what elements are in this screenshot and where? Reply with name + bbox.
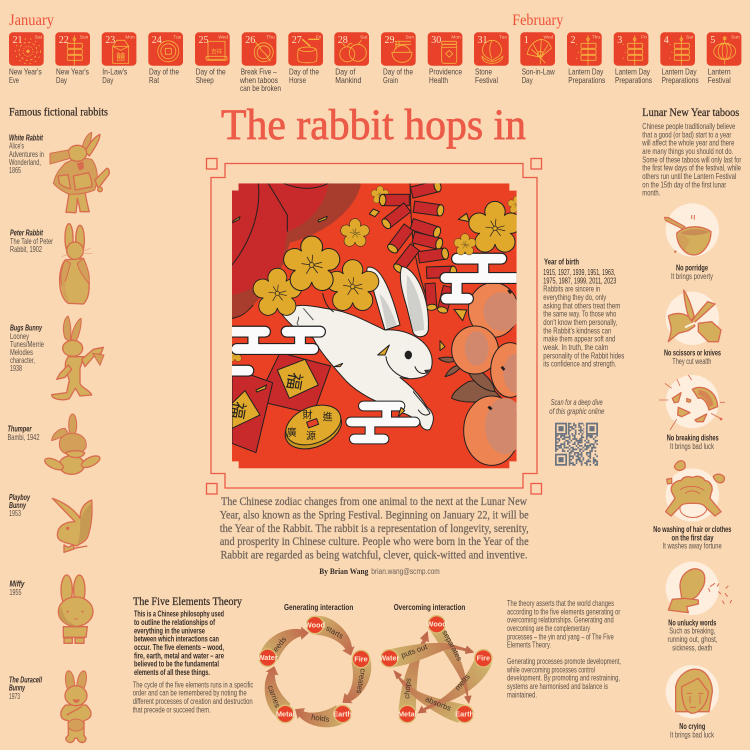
icon: no crying xyxy=(666,665,719,718)
arrows xyxy=(248,616,381,744)
day 21: Eve xyxy=(9,75,19,85)
day 1: Wed xyxy=(544,34,554,40)
Thumper text: Bambi, 1942 xyxy=(8,433,40,442)
oranges with leaves xyxy=(438,284,517,466)
five elements explanation: Generating processes promote development, xyxy=(507,657,621,666)
labels: holds xyxy=(311,712,330,724)
icon: no washing hair xyxy=(666,461,724,522)
five elements explanation: overcoming are the complementary xyxy=(507,624,591,633)
five elements text: believed to be the fundamental xyxy=(134,660,219,669)
day 26: Break Five – xyxy=(241,67,277,77)
day 31 xyxy=(474,32,509,85)
generating interaction diagram xyxy=(248,602,381,744)
icon: no unlucky words xyxy=(666,562,732,615)
day 23: 囍 xyxy=(116,51,125,62)
year of birth text: the Rabbit's kindness can xyxy=(543,326,612,335)
Playboy Bunny text xyxy=(9,493,30,518)
day 1: Day xyxy=(522,75,533,85)
day 1: 1 xyxy=(524,35,529,46)
White Rabbit text: 1865 xyxy=(9,166,21,175)
day 4: Sat xyxy=(686,34,694,40)
five elements explanation xyxy=(506,599,621,699)
day 26: Thu xyxy=(266,34,275,40)
day 22: Sun xyxy=(80,34,89,40)
day 5: Sun xyxy=(731,34,740,40)
day 24: Day of the xyxy=(149,67,179,77)
day 30: Providence xyxy=(429,67,462,77)
day 28 xyxy=(334,32,369,85)
day 23: Day xyxy=(102,75,114,85)
day 22: Day xyxy=(56,75,68,85)
day 3: Preparations xyxy=(615,75,652,85)
text: no scissors: They cut wealth xyxy=(672,357,712,366)
day 31: Festival xyxy=(475,75,498,85)
red envelopes with paper charms: 福 xyxy=(226,400,249,421)
Bugs Bunny text: character, xyxy=(10,356,35,365)
Bugs Bunny text xyxy=(10,324,44,373)
five elements text: The Five Elements Theory xyxy=(133,596,242,608)
Duracell Bunny text: The Duracell xyxy=(9,675,42,684)
five elements text: that precede or succeed them. xyxy=(133,705,211,714)
icon: no porridge xyxy=(664,203,719,257)
year of birth text: 1915, 1927, 1939, 1951, 1963, xyxy=(543,268,615,277)
labels: puts out xyxy=(400,642,429,660)
five elements text: between which interactions can xyxy=(134,635,219,644)
day 25 xyxy=(195,32,230,85)
day 3: Fri xyxy=(641,34,647,40)
day 21 xyxy=(9,32,44,85)
day 31: Tue xyxy=(499,34,507,40)
day 3 xyxy=(614,32,652,85)
nodes: Metal xyxy=(398,709,417,718)
day 2: 2 xyxy=(570,35,576,46)
nodes: Wood xyxy=(305,620,325,629)
text: no unlucky words: No unlucky words xyxy=(668,618,717,627)
Peter Rabbit text xyxy=(10,229,53,254)
heading: Lunar New Year taboos xyxy=(642,107,740,119)
arrows xyxy=(390,628,492,723)
five elements text: This is a Chinese philosophy used xyxy=(134,610,224,619)
five elements text: different processes of creation and destruction xyxy=(133,697,253,706)
White Rabbit text: Wonderland, xyxy=(9,158,41,167)
year of birth text: Year of birth xyxy=(544,258,579,267)
QR caption: of this graphic online xyxy=(549,407,605,416)
day 21: New Year's xyxy=(9,67,42,77)
day 25: 25 xyxy=(198,35,208,46)
Playboy Bunny text: Bunny xyxy=(9,501,26,510)
gold coin: 廣 xyxy=(287,426,297,439)
White Rabbit text xyxy=(9,134,44,175)
Bugs Bunny figure xyxy=(52,316,104,400)
day 23 xyxy=(102,32,136,85)
day 26 xyxy=(239,32,281,93)
day 2: Lantern Day xyxy=(568,67,604,77)
day 1: Son-in-Law xyxy=(522,67,555,77)
text: no scissors: No scissors or knives xyxy=(664,349,721,358)
White Rabbit text: Adventures in xyxy=(9,150,44,159)
day 5 xyxy=(707,32,741,85)
five elements explanation: systems are harmonised and balance is xyxy=(507,682,608,691)
day 23: In-Law's xyxy=(102,67,127,77)
day 2 xyxy=(567,32,605,85)
labels xyxy=(266,624,368,724)
labels: chops xyxy=(402,678,413,699)
red envelopes with paper charms: 福 xyxy=(283,371,306,392)
heading: Famous fictional rabbits xyxy=(9,107,108,119)
day 28: Sat xyxy=(360,34,368,40)
day 26: when taboos xyxy=(239,75,278,85)
day 5: Festival xyxy=(708,75,731,85)
day 24: Tue xyxy=(173,34,182,40)
text: no breaking dishes xyxy=(667,434,719,451)
heading: Generating interaction xyxy=(284,602,353,612)
day 30: Mon xyxy=(451,34,461,40)
QR caption: Scan for a deep dive xyxy=(551,398,603,407)
gold coin xyxy=(284,404,342,450)
byline xyxy=(319,566,440,576)
illustration background xyxy=(230,182,520,472)
Duracell Bunny figure xyxy=(61,670,91,743)
Thumper text xyxy=(8,425,40,442)
nodes: Wood xyxy=(427,620,447,629)
nodes xyxy=(379,616,492,723)
year of birth text: personality of the Rabbit hides xyxy=(543,351,624,360)
icon: no breaking dishes xyxy=(659,375,725,430)
panel: lunar new year taboos xyxy=(642,107,741,739)
White Rabbit text: White Rabbit xyxy=(9,134,43,143)
calendar strip xyxy=(9,32,741,93)
Bugs Bunny text: Looney xyxy=(10,332,30,341)
white clouds xyxy=(227,259,520,439)
labels: separates xyxy=(440,629,464,663)
five elements explanation: processes – the yin and yang – of The Five xyxy=(507,632,614,641)
day 27 xyxy=(288,32,323,85)
day 5: 5 xyxy=(710,35,715,46)
rabbit xyxy=(282,267,433,430)
gold coin: 財 xyxy=(303,409,313,422)
day 29 xyxy=(381,32,416,85)
dark red lantern shape xyxy=(232,183,361,319)
labels: melts xyxy=(453,672,472,692)
day 24 xyxy=(148,32,183,85)
labels: creates xyxy=(354,668,368,694)
day 3: Lantern Day xyxy=(615,67,651,77)
nodes: Water xyxy=(379,654,400,663)
day 29: Day of the xyxy=(383,67,413,77)
day 1 xyxy=(520,32,555,85)
panel: famous fictional rabbits xyxy=(8,107,109,743)
nodes: Water xyxy=(258,653,278,662)
nodes: Earth xyxy=(455,709,475,718)
day 31: 31 xyxy=(478,35,488,46)
nodes: Fire xyxy=(354,654,368,663)
labels: absorbs xyxy=(424,694,453,713)
five elements explanation: while overcoming processes control xyxy=(506,665,595,674)
firecrackers xyxy=(379,180,457,314)
year of birth text: weak. In truth, the calm xyxy=(543,343,608,352)
Bugs Bunny text: Bugs Bunny xyxy=(10,324,42,333)
red envelopes with paper charms xyxy=(226,353,331,453)
Bugs Bunny text: Melodies xyxy=(10,348,33,357)
five elements text: occur. The five elements – wood, xyxy=(134,643,224,652)
Playboy Bunny text: 1953 xyxy=(9,509,21,518)
intro paragraph xyxy=(220,494,529,562)
day 29: Sun xyxy=(405,34,414,40)
Bugs Bunny text: Tunes/Merrie xyxy=(10,340,44,349)
text: no scissors xyxy=(664,349,721,366)
Playboy Bunny text: Playboy xyxy=(9,493,30,502)
heading: February: February xyxy=(512,12,564,29)
intro paragraph: Year, also known as the Spring Festival. Beginning on January 22, it will be xyxy=(220,508,529,522)
text: no porridge: No porridge xyxy=(676,264,708,273)
intro paragraph: The Chinese zodiac changes from one animal to the next at the Lunar New xyxy=(221,494,527,508)
icon: no scissors xyxy=(666,290,721,345)
intro paragraph: and prosperity in Chinese culture. People who were born in the Year of the xyxy=(220,534,529,548)
five elements text: elements of all these things. xyxy=(134,668,210,677)
Bugs Bunny text: 1938 xyxy=(10,364,22,373)
five elements text: to outline the relationships of xyxy=(134,618,215,627)
day 30: Health xyxy=(429,75,448,85)
day 27: 27 xyxy=(292,35,302,46)
day 24: Rat xyxy=(149,75,160,85)
text: no breaking dishes: No breaking dishes xyxy=(667,434,719,443)
year of birth text xyxy=(543,258,624,369)
day 26: can be broken xyxy=(240,83,281,93)
nodes: Earth xyxy=(333,709,353,718)
day 21: Sat xyxy=(35,34,43,40)
five elements explanation: according to the five elements generating or xyxy=(507,607,620,616)
large flowers xyxy=(253,201,521,417)
year of birth text: asking that others treat them xyxy=(543,301,620,310)
QR code xyxy=(555,424,598,465)
five elements text: fire, earth, metal and water – are xyxy=(134,651,224,660)
White Rabbit text: Alice's xyxy=(9,142,24,151)
day 24: 24 xyxy=(152,35,162,46)
five elements explanation: development. By promoting and restraining, xyxy=(507,674,620,683)
Peter Rabbit text: Peter Rabbit xyxy=(10,229,43,238)
day 3: 3 xyxy=(617,35,622,46)
five elements text xyxy=(133,596,253,714)
day 25: 吉祥 xyxy=(211,47,223,55)
Miffy figure xyxy=(58,575,93,643)
labels: feeds xyxy=(270,635,288,655)
labels: starts xyxy=(324,624,345,641)
nodes xyxy=(258,616,370,723)
day 5: Lantern xyxy=(708,67,731,77)
heading: Overcoming interaction xyxy=(394,602,465,612)
day 30: 30 xyxy=(431,35,441,46)
Thumper text: Thumper xyxy=(8,425,32,434)
text: no unlucky words: running out, ghost, xyxy=(668,635,718,644)
text: no washing xyxy=(653,525,732,551)
day 28: Mankind xyxy=(335,75,362,85)
day 30 xyxy=(428,32,462,85)
five elements text: order and can be remembered by noting the xyxy=(133,689,247,698)
text: no crying: No crying xyxy=(679,722,705,731)
day 29: 29 xyxy=(384,35,394,46)
intro paragraph: Rabbit are regarded as being watchful, clever, quick-witted and inventive. xyxy=(220,548,528,562)
day 21: 21 xyxy=(12,35,22,46)
day 23: 23 xyxy=(105,35,115,46)
White Rabbit figure xyxy=(50,132,109,213)
labels xyxy=(400,629,472,713)
day 27: Day of the xyxy=(289,67,319,77)
text: no porridge xyxy=(671,264,714,281)
five elements explanation: Elements Theory. xyxy=(507,641,551,650)
Duracell Bunny text xyxy=(9,675,42,701)
Duracell Bunny text: 1973 xyxy=(9,692,20,701)
intro paragraph: the Year of the Rabbit. The rabbit is a representation of longevity, serenity, xyxy=(220,521,529,535)
day 26: 26 xyxy=(245,35,255,46)
byline: By Brian Wang xyxy=(319,566,369,576)
day 2: Preparations xyxy=(568,75,605,85)
five elements explanation: The theory asserts that the world changes xyxy=(507,599,614,608)
intro text: month. xyxy=(642,189,660,198)
title: The rabbit hops in xyxy=(221,102,526,149)
QR caption xyxy=(549,398,605,416)
year of birth text: the same way. To those who xyxy=(543,310,617,319)
day 28: Day of xyxy=(335,67,356,77)
day 25: Day of the xyxy=(196,67,226,77)
day 23: Mon xyxy=(125,34,135,40)
text: no unlucky words: sickness, death xyxy=(672,643,713,652)
text: no crying: It brings bad luck xyxy=(670,730,715,739)
five elements text: The cycle of the five elements runs in a specific xyxy=(133,680,253,689)
year of birth text: 1975, 1987, 1999, 2011, 2023 xyxy=(543,276,617,285)
day 31: Stone xyxy=(475,67,492,77)
overcoming interaction diagram xyxy=(379,602,492,723)
Miffy text: Miffy xyxy=(10,580,25,589)
five elements explanation: overcoming relationships. Generating and xyxy=(507,616,614,625)
nodes: Metal xyxy=(276,709,295,718)
Peter Rabbit text: Rabbit, 1902 xyxy=(10,245,42,254)
Miffy text: 1955 xyxy=(10,588,22,597)
day 4: 4 xyxy=(664,35,669,46)
year of birth text: Rabbits are sincere in xyxy=(543,285,601,294)
text: no breaking dishes: It brings bad luck xyxy=(670,442,715,451)
year of birth text: make them appear soft and xyxy=(543,335,616,344)
small flowers and petals xyxy=(227,186,525,361)
day 2: Thu xyxy=(592,34,600,40)
day 25: Wed xyxy=(218,34,228,40)
labels: carries xyxy=(266,684,282,709)
Peter Rabbit figure xyxy=(60,224,93,304)
gold coin: 進 xyxy=(323,412,333,424)
day 28: 28 xyxy=(338,35,348,46)
text: no porridge: It brings poverty xyxy=(671,272,714,281)
day 25: Sheep xyxy=(196,75,214,85)
Miffy text xyxy=(10,580,25,597)
gold coin: 源 xyxy=(306,429,316,442)
text: no crying xyxy=(670,722,715,739)
heading: January: January xyxy=(9,12,54,29)
main illustration xyxy=(226,180,530,472)
Peter Rabbit text: The Tale of Peter xyxy=(10,237,53,246)
text: no unlucky words xyxy=(668,618,718,652)
byline: brian.wang@scmp.com xyxy=(371,567,440,576)
day 22: 22 xyxy=(59,35,69,46)
day 4: Preparations xyxy=(662,75,699,85)
five elements text: everything in the universe xyxy=(134,626,205,635)
text: no unlucky words: Such as breaking, xyxy=(669,627,715,636)
five elements explanation: maintained. xyxy=(507,690,537,699)
Thumper figure xyxy=(43,414,102,474)
text: no washing: It washes away fortune xyxy=(663,542,722,551)
day 29: Grain xyxy=(383,75,398,85)
Duracell Bunny text: Bunny xyxy=(9,684,25,693)
nodes: Fire xyxy=(477,654,490,663)
day 27: Horse xyxy=(289,75,306,85)
day 22: New Year's xyxy=(56,67,89,77)
text: no washing: on the first day xyxy=(672,533,714,542)
year of birth text: its confidence and strength. xyxy=(543,360,616,369)
decorative frame xyxy=(206,158,542,494)
intro text xyxy=(642,122,741,198)
day 22 xyxy=(55,32,90,85)
year of birth text: everything they do, only xyxy=(543,293,607,302)
Playboy Bunny figure xyxy=(52,498,92,552)
year of birth text: don't know them personally, xyxy=(543,318,617,327)
day 27: Fri xyxy=(316,34,321,40)
day 4 xyxy=(660,32,699,85)
day 4: Lantern Day xyxy=(662,67,697,77)
